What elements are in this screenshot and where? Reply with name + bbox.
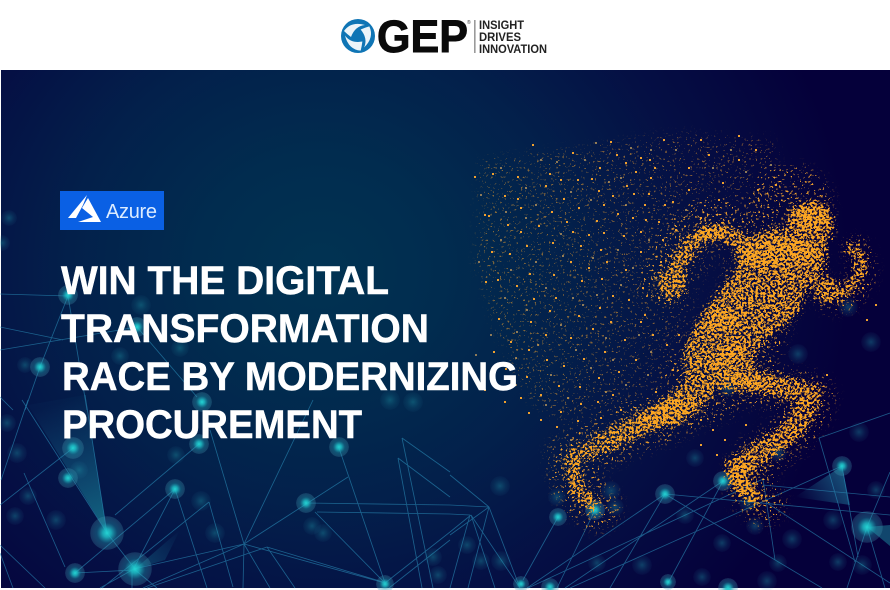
GEP wordmark: GEP [377, 11, 468, 62]
network of lines and glowing nodes [0, 210, 890, 590]
icon: GEP swirl [341, 19, 376, 54]
particle runner figure [570, 201, 862, 505]
logo divider [474, 20, 476, 53]
Azure label: Azure [106, 201, 157, 223]
runner dense highlights [635, 203, 830, 498]
runner silhouette [570, 201, 862, 505]
registered mark: ® [467, 19, 471, 26]
runner back arm [673, 232, 747, 280]
logo tagline [479, 20, 547, 56]
icon: Azure triangle mark [68, 195, 101, 222]
runner rear leg [667, 373, 710, 413]
particle halo around runner [477, 133, 862, 507]
dim particles [475, 143, 772, 440]
logo tagline: INSIGHT [479, 20, 524, 32]
bright particles [474, 136, 877, 455]
title: WIN THE DIGITAL [61, 259, 389, 303]
runner head [787, 201, 835, 249]
title: TRANSFORMATION [61, 307, 429, 351]
title [61, 259, 518, 447]
bright network nodes [30, 285, 883, 590]
scattered particles [474, 136, 877, 455]
logo: GEP [341, 11, 547, 62]
dim network nodes [0, 210, 885, 590]
title: RACE BY MODERNIZING [62, 355, 518, 399]
runner front leg [720, 378, 810, 472]
runner torso [683, 228, 827, 390]
logo tagline: INNOVATION [479, 44, 547, 56]
network lines [0, 294, 890, 588]
Azure badge [60, 191, 164, 230]
title: PROCUREMENT [62, 403, 362, 447]
runner front arm [813, 247, 862, 296]
network light beams [28, 395, 890, 569]
logo tagline: DRIVES [479, 32, 521, 44]
